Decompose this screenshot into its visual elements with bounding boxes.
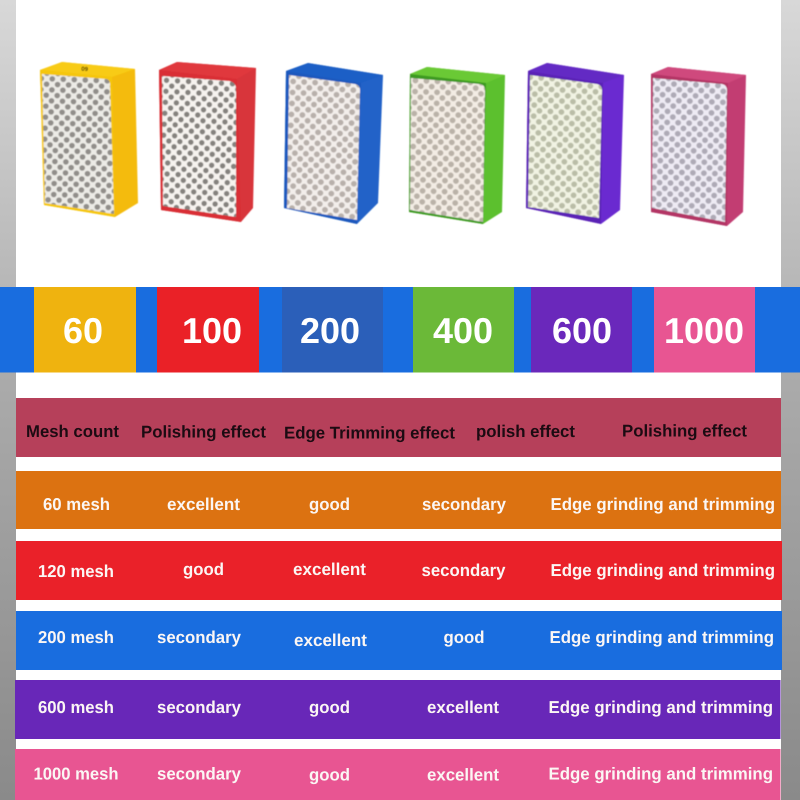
table row: 600 mesh: excellent xyxy=(427,697,499,717)
table row: 60 mesh xyxy=(16,471,781,529)
table header row: Mesh count xyxy=(26,422,119,441)
table row: 600 mesh: Edge grinding and trimming xyxy=(548,697,773,717)
table row: 60 mesh: 60 mesh xyxy=(43,494,110,514)
swatch: 400: 400 xyxy=(433,310,493,351)
table row: 600 mesh xyxy=(15,680,780,739)
pad: red 100 grit xyxy=(159,62,256,222)
table row: 120 mesh: 120 mesh xyxy=(38,561,114,581)
table row: 1000 mesh: 1000 mesh xyxy=(34,764,118,784)
table row: 200 mesh xyxy=(16,611,782,670)
table row: 120 mesh: good xyxy=(183,559,224,579)
table row: 1000 mesh: excellent xyxy=(427,764,499,784)
table row: 120 mesh: secondary xyxy=(422,560,506,580)
table row: 120 mesh: excellent xyxy=(293,559,366,579)
table header row: Polishing effect xyxy=(622,422,747,440)
pad: yellow 60 grit xyxy=(40,62,138,217)
swatch: 60: 60 xyxy=(63,310,103,351)
grit colour band xyxy=(0,287,800,372)
table row: 1000 mesh: Edge grinding and trimming xyxy=(548,764,773,784)
pad: green 400 grit xyxy=(409,67,505,224)
table row: 1000 mesh xyxy=(15,749,780,800)
table header row xyxy=(16,398,781,457)
table row: 60 mesh: good xyxy=(309,494,350,514)
table row: 60 mesh: excellent xyxy=(167,494,240,514)
pad: blue 200 grit xyxy=(284,63,383,224)
table row: 600 mesh: secondary xyxy=(157,697,241,717)
swatch: 100 xyxy=(157,287,259,372)
swatch: 200: 200 xyxy=(300,310,360,351)
table row: 60 mesh: Edge grinding and trimming xyxy=(550,494,775,514)
pad: yellow 60 grit: 60 xyxy=(80,64,88,72)
product photos: six polishing pads xyxy=(40,62,746,226)
table row: 120 mesh: Edge grinding and trimming xyxy=(550,560,775,580)
table row: 1000 mesh: good xyxy=(309,764,350,784)
table row: 200 mesh: secondary xyxy=(157,627,241,647)
swatch: 1000 xyxy=(654,287,755,372)
table row: 200 mesh: good xyxy=(444,627,484,647)
table row: 60 mesh: secondary xyxy=(422,494,506,514)
swatch: 600 xyxy=(531,287,632,372)
table row: 200 mesh: excellent xyxy=(294,630,367,650)
swatch: 600: 600 xyxy=(552,310,612,351)
table header row: Polishing effect xyxy=(141,422,266,442)
swatch: 100: 100 xyxy=(182,310,242,351)
pad: pink 1000 grit xyxy=(651,67,746,226)
table row: 200 mesh: Edge grinding and trimming xyxy=(550,627,774,647)
swatch: 1000: 1000 xyxy=(664,310,744,351)
swatch: 200 xyxy=(282,287,383,372)
table header row: Edge Trimming effect xyxy=(284,424,455,442)
table row: 200 mesh: 200 mesh xyxy=(38,627,114,647)
swatch: 60 xyxy=(34,287,136,372)
table row: 120 mesh xyxy=(16,541,782,600)
table row: 600 mesh: good xyxy=(309,697,350,717)
pad: purple 600 grit xyxy=(526,63,624,224)
swatch: 400 xyxy=(413,287,514,372)
table row: 1000 mesh: secondary xyxy=(157,764,241,784)
table row: 600 mesh: 600 mesh xyxy=(38,697,114,717)
table header row: polish effect xyxy=(476,422,575,441)
